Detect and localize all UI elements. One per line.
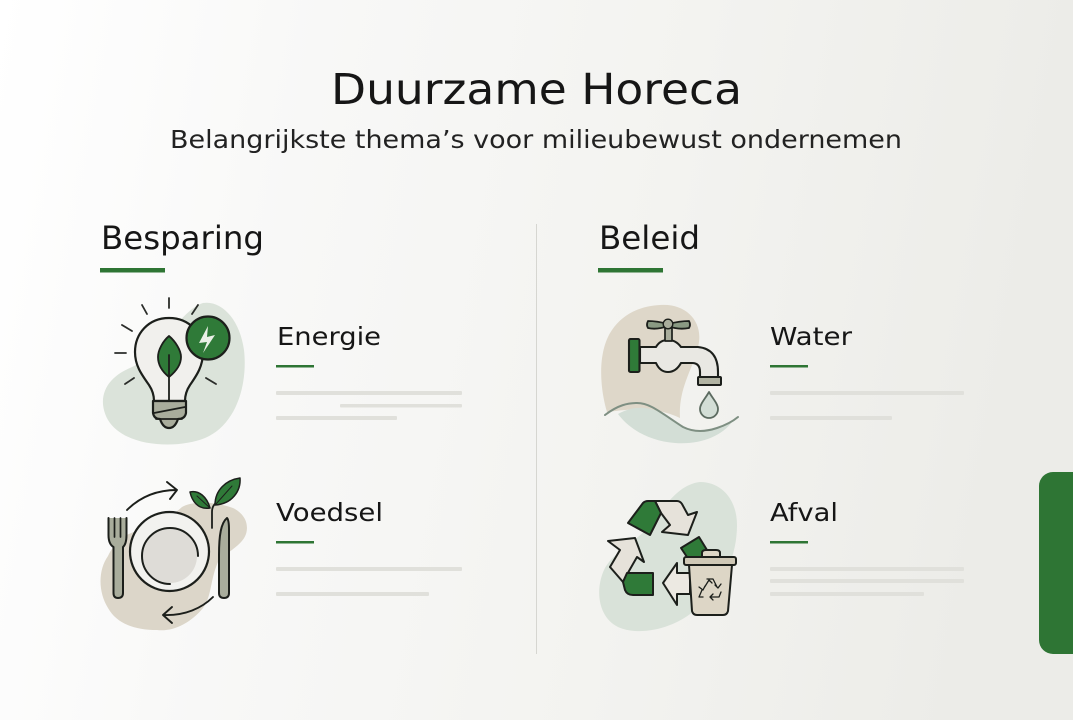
heading: Beleid: Beleid bbox=[599, 219, 700, 257]
title: Duurzame Horeca bbox=[331, 65, 742, 115]
side tab bbox=[1039, 472, 1073, 654]
subtitle: Belangrijkste thema’s voor milieubewust ondernemen bbox=[170, 125, 902, 154]
item: Energie: Energie bbox=[277, 322, 381, 351]
heading: Besparing: Besparing bbox=[101, 219, 264, 257]
icon: water tap with drop bbox=[601, 305, 738, 443]
heading: Besparing bbox=[100, 219, 264, 272]
column divider bbox=[536, 224, 537, 654]
panel: Besparing bbox=[100, 219, 462, 630]
panel: Beleid bbox=[598, 219, 964, 631]
item: Water: Water bbox=[770, 322, 853, 351]
icon: plate with cutlery and sprout bbox=[100, 478, 247, 630]
heading: Beleid bbox=[598, 219, 700, 272]
item: Voedsel: Voedsel bbox=[276, 498, 383, 527]
item: Water bbox=[770, 322, 964, 420]
item: Energie bbox=[276, 322, 462, 420]
item: Voedsel bbox=[276, 498, 462, 596]
icon: light bulb with leaf bbox=[103, 298, 245, 445]
item: Afval: Afval bbox=[770, 498, 838, 527]
item: Afval bbox=[770, 498, 964, 596]
icon: recycling arrows and bin bbox=[599, 482, 737, 631]
